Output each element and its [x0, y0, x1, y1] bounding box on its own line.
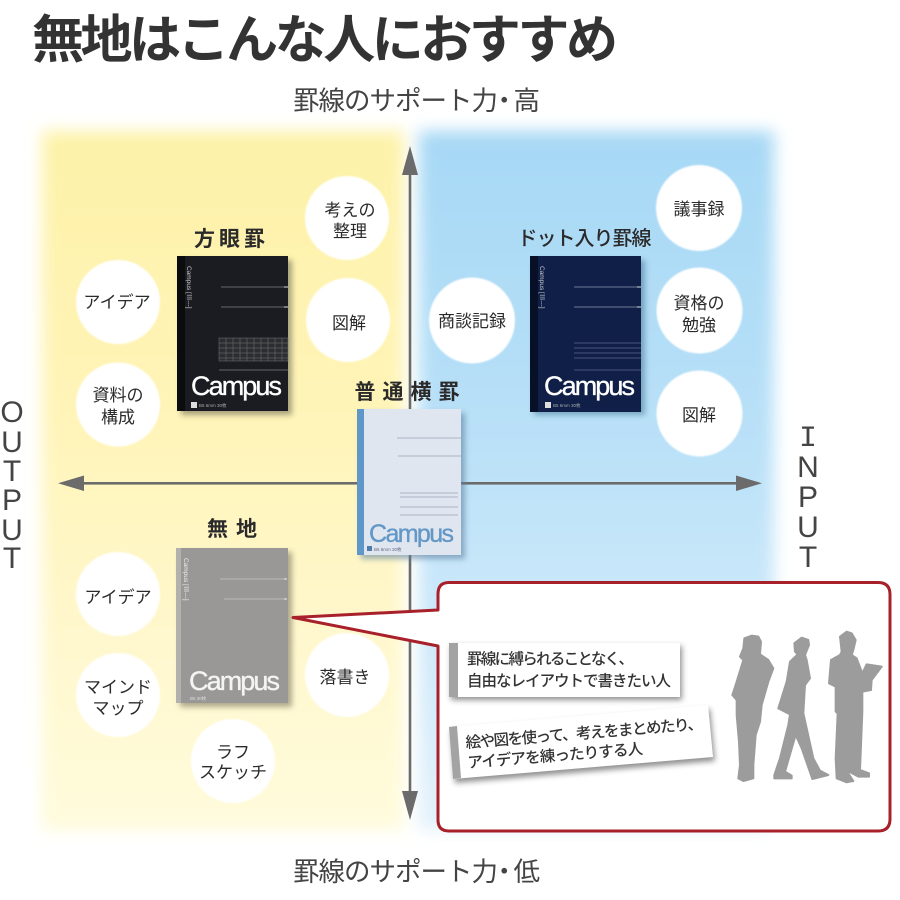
circle: ラフスケッチ: ラフ [216, 743, 250, 762]
circle: マインドマップ: マップ [92, 699, 144, 718]
axis label: output: T [3, 542, 21, 575]
circle: 資料の構成: 資料の [92, 386, 144, 405]
title: 無地はこんな人におすすめ [32, 12, 618, 70]
circle: 商談記録: 商談記録 [438, 312, 506, 331]
callout: who the blank notebook suits [293, 582, 890, 831]
notebook: blank gray [176, 548, 292, 707]
axis label: output [0, 396, 24, 575]
circle: 資格の勉強 [656, 268, 742, 354]
circle: 考えの整理 [305, 176, 389, 260]
icon: three business silhouettes [732, 632, 882, 782]
notebook: blank gray: Campus [189, 666, 280, 696]
notebook: blank gray: Campus [Ⅲ---] [182, 558, 189, 601]
circle: 考えの整理: 考えの [324, 201, 376, 220]
circle: 図解 right [656, 370, 742, 456]
circle: ラフスケッチ: スケッチ [199, 763, 267, 782]
circle: 図解 right: 図解 [682, 406, 716, 425]
axis label: input: I [799, 422, 817, 456]
notebook: regular ruled blue: Campus [369, 520, 454, 548]
heading: 無地: 無地 [207, 518, 257, 541]
circle: 資料の構成 [76, 362, 160, 446]
axis label: input: P [798, 481, 818, 514]
notebook: dotted navy: B5 6mm 30枚 [553, 402, 581, 409]
notebook: grid dark: Campus [Ⅲ---] [185, 266, 192, 309]
circle: 資格の勉強: 資格の [674, 294, 724, 313]
circle: 考えの整理: 整理 [333, 222, 367, 241]
label: first description [449, 643, 682, 700]
circle: 商談記録 [429, 278, 515, 364]
circle: 資料の構成: 構成 [101, 408, 135, 427]
axis label: output: T [3, 455, 21, 488]
label: first description: 自由なレイアウトで書きたい人 [467, 672, 671, 690]
circle: 落書き: 落書き [320, 668, 370, 687]
notebook: grid dark: Campus [191, 371, 282, 401]
panel: yellow output quadrants [42, 131, 404, 830]
circle: 落書き [305, 633, 389, 717]
circle: アイデア lower: アイデア [84, 587, 152, 607]
panel: blue input quadrants [419, 131, 774, 830]
arrow: vertical axis [402, 146, 418, 820]
notebook: dotted navy: Campus [Ⅲ---] [538, 266, 545, 309]
axis label: output: U [1, 514, 23, 547]
circle: マインドマップ: マインド [84, 678, 152, 697]
notebook: dotted navy [530, 256, 645, 415]
notebook: regular ruled blue [357, 409, 465, 559]
circle: アイデア lower [76, 552, 160, 636]
circle: アイデア: アイデア [83, 292, 151, 312]
heading: ドット入り罫線: ドット入り罫線 [518, 227, 652, 250]
label: second description [449, 705, 715, 783]
circle: ラフスケッチ [191, 719, 275, 803]
notebook: dotted navy: Campus [544, 371, 635, 401]
axis label: input: U [797, 511, 819, 544]
axis label: input [797, 422, 819, 574]
label: first description: 罫線に縛られることなく、 [467, 650, 634, 668]
axis label: input: T [799, 541, 817, 574]
axis label: input: N [797, 451, 819, 484]
axis label: low ruled-line support: 罫線のサポート力・低 [293, 857, 540, 887]
notebook: grid dark [177, 256, 292, 415]
axis label: output: U [1, 426, 23, 459]
axis label: high ruled-line support: 罫線のサポート力・高 [293, 86, 539, 116]
circle: 議事録 [656, 165, 742, 251]
notebook: blank gray: B5 30枚 [190, 695, 207, 702]
axis label: output: P [2, 484, 22, 517]
heading: 普通横罫: 普通横罫 [354, 381, 460, 404]
circle: マインドマップ [76, 653, 160, 737]
label: second description: 絵や図を使って、考えをまとめたり、 [465, 715, 704, 752]
axis label: output: O [0, 396, 24, 429]
circle: 議事録: 議事録 [674, 200, 724, 219]
arrow: horizontal axis [58, 476, 762, 491]
circle: アイデア [76, 260, 160, 344]
circle: 図解 [306, 278, 390, 362]
circle: 図解: 図解 [332, 314, 366, 333]
label: second description: アイデアを練ったりする人 [467, 739, 644, 772]
circle: 資格の勉強: 勉強 [682, 316, 716, 335]
notebook: grid dark: B5 6mm 30枚 [199, 402, 227, 409]
heading: 方眼罫: 方眼罫 [194, 228, 265, 251]
notebook: regular ruled blue: B5 6mm 30枚 [374, 546, 402, 553]
